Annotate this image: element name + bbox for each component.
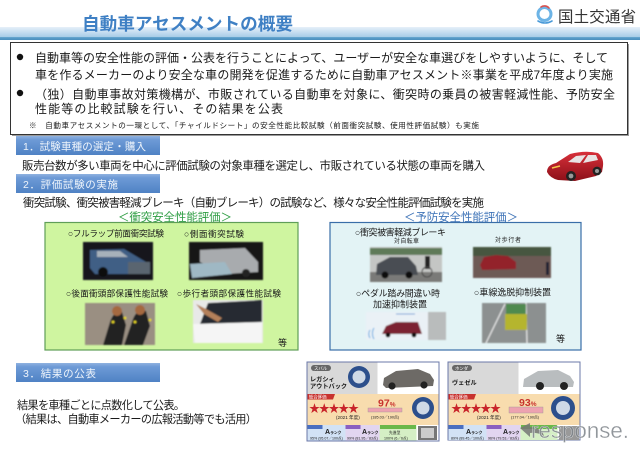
section 1 heading xyxy=(16,136,160,155)
section 1 heading: 1．試験車種の選定・購入 xyxy=(23,140,146,153)
category scores: Aランク xyxy=(362,429,379,436)
rating card: Subaru Legacy Outback: レガシィ xyxy=(310,376,335,384)
panel: overview xyxy=(10,42,629,136)
category scores: 先進型 xyxy=(389,430,401,435)
overall score: (185.03／190点) xyxy=(371,414,400,420)
section 3 text: 結果を車種ごとに点数化して公表。 xyxy=(17,398,185,412)
overall score xyxy=(308,394,438,425)
overall score: ★★★★★ xyxy=(451,403,501,415)
category scores: 100% (6／6点) xyxy=(384,436,408,440)
panel: crash safety tests xyxy=(45,222,298,350)
overall score: 97% xyxy=(378,398,396,410)
section 3 heading xyxy=(16,363,160,382)
category scores: 95% (95.07／100点) xyxy=(310,436,343,440)
rating card: Subaru Legacy Outback: スバル xyxy=(314,366,328,371)
photo: lane departure xyxy=(482,303,546,343)
section 2 heading xyxy=(16,174,160,193)
heading: crash safety: ＜衝突安全性能評価＞ xyxy=(118,210,232,224)
watermark: response: response. xyxy=(531,418,629,443)
heading: preventive safety: ＜予防安全性能評価＞ xyxy=(404,210,518,224)
category scores: Aランク xyxy=(466,429,483,436)
title: 自動車アセスメントの概要 xyxy=(82,14,293,34)
label: pedal misapplication: ○ペダル踏み間違い時 xyxy=(356,288,440,298)
rating card: Honda Vezel: ホンダ xyxy=(455,365,469,372)
section 2 text: 衝突試験、衝突被害軽減ブレーキ（自動ブレーキ）の試験など、様々な安全性能評価試験を実施 xyxy=(23,196,484,210)
photo: AEB vs pedestrian xyxy=(473,247,551,278)
section 2 heading: 2．評価試験の実施 xyxy=(23,178,118,191)
bullet 2 xyxy=(17,86,615,116)
note: etc: 等 xyxy=(278,337,287,348)
category scores: Aランク xyxy=(325,429,342,436)
section 3 heading: 3．結果の公表 xyxy=(23,367,96,380)
ministry name: 国土交通省 xyxy=(558,8,636,26)
label: pedal misapplication xyxy=(356,288,440,310)
category scores: 96% (79.53／83点) xyxy=(488,436,519,440)
label: AEB: ○衝突被害軽減ブレーキ xyxy=(355,226,446,238)
icon: ministry emblem xyxy=(538,6,552,23)
rating card: Honda Vezel: ヴェゼル xyxy=(452,379,477,387)
category scores xyxy=(308,425,437,440)
label: vs pedestrian: 対歩行者 xyxy=(495,236,521,244)
footnote: ※ 自動車アセスメントの一環として、「チャイルドシート」の安全性能比較試験（前面衝突試験、使用性評価試験）も実施 xyxy=(29,120,479,130)
photo: pedestrian head test xyxy=(193,300,263,343)
photo: whiplash dummies xyxy=(85,303,155,345)
bullet 2: （独）自動車事故対策機構が、市販されている自動車を対象に、衝突時の乗員の被害軽減性能、予防安全 xyxy=(35,86,615,102)
bullet 1: 自動車等の安全性能の評価・公表を行うことによって、ユーザーが安全な車選びをしやすいように、そして xyxy=(35,50,608,65)
label: pedal misapplication: 加速抑制装置 xyxy=(373,298,427,310)
label: lane departure: ○車線逸脱抑制装置 xyxy=(474,286,551,298)
overall score: (2021 年度) xyxy=(336,414,360,421)
photo: pedal misapplication xyxy=(366,312,446,340)
photo: full wrap frontal crash xyxy=(83,242,153,280)
photo: AEB vs bicycle xyxy=(370,247,442,282)
category scores: Aランク xyxy=(503,429,520,436)
car photo xyxy=(523,370,574,387)
overall score: 総合評価 xyxy=(450,394,468,401)
panel: preventive safety tests xyxy=(330,222,581,350)
logo: ministry xyxy=(538,6,636,26)
bullet 2: 性能等の比較試験を行い、その結果を公表 xyxy=(35,101,283,116)
bullet 1: 車を作るメーカーのより安全な車の開発を促進するために自動車アセスメント※事業を平成7年度より実施 xyxy=(35,68,613,82)
note: etc: 等 xyxy=(556,333,565,344)
rating card: Subaru Legacy Outback: アウトバック xyxy=(310,382,347,390)
icon: red car xyxy=(547,152,603,181)
label: full wrap: ○フルラップ前面衝突試験 xyxy=(68,228,164,238)
header band xyxy=(0,27,640,40)
car photo xyxy=(383,369,434,388)
label: vs bicycle: 対自転車 xyxy=(394,237,419,245)
label: side crash: ○側面衝突試験 xyxy=(184,228,244,239)
category scores: 99% (81.95／83点) xyxy=(347,436,378,440)
section 1 text: 販売台数が多い車両を中心に評価試験の対象車種を選定し、市販されている状態の車両を購入 xyxy=(22,158,486,172)
bullet 1 xyxy=(17,50,613,82)
section 3 text xyxy=(15,398,257,426)
rating card: Subaru Legacy Outback xyxy=(307,362,439,441)
photo: side crash xyxy=(189,242,263,280)
label: pedestrian head: ○歩行者頭部保護性能試験 xyxy=(177,288,281,298)
label: whiplash: ○後面衝頭部保護性能試験 xyxy=(66,288,168,298)
overall score: ★★★★★ xyxy=(309,403,359,415)
rating card: Honda Vezel xyxy=(448,362,580,440)
section 3 text: （結果は、自動車メーカーの広報活動等でも活用） xyxy=(15,412,257,426)
category scores xyxy=(448,425,579,440)
overall score xyxy=(448,394,580,425)
category scores: 89% (89.45／100点) xyxy=(451,436,484,440)
overall score: (177.04／190点) xyxy=(511,414,540,420)
overall score: 総合評価 xyxy=(309,394,327,401)
overall score: 93% xyxy=(519,397,537,409)
overall score: (2021 年度) xyxy=(477,414,501,421)
